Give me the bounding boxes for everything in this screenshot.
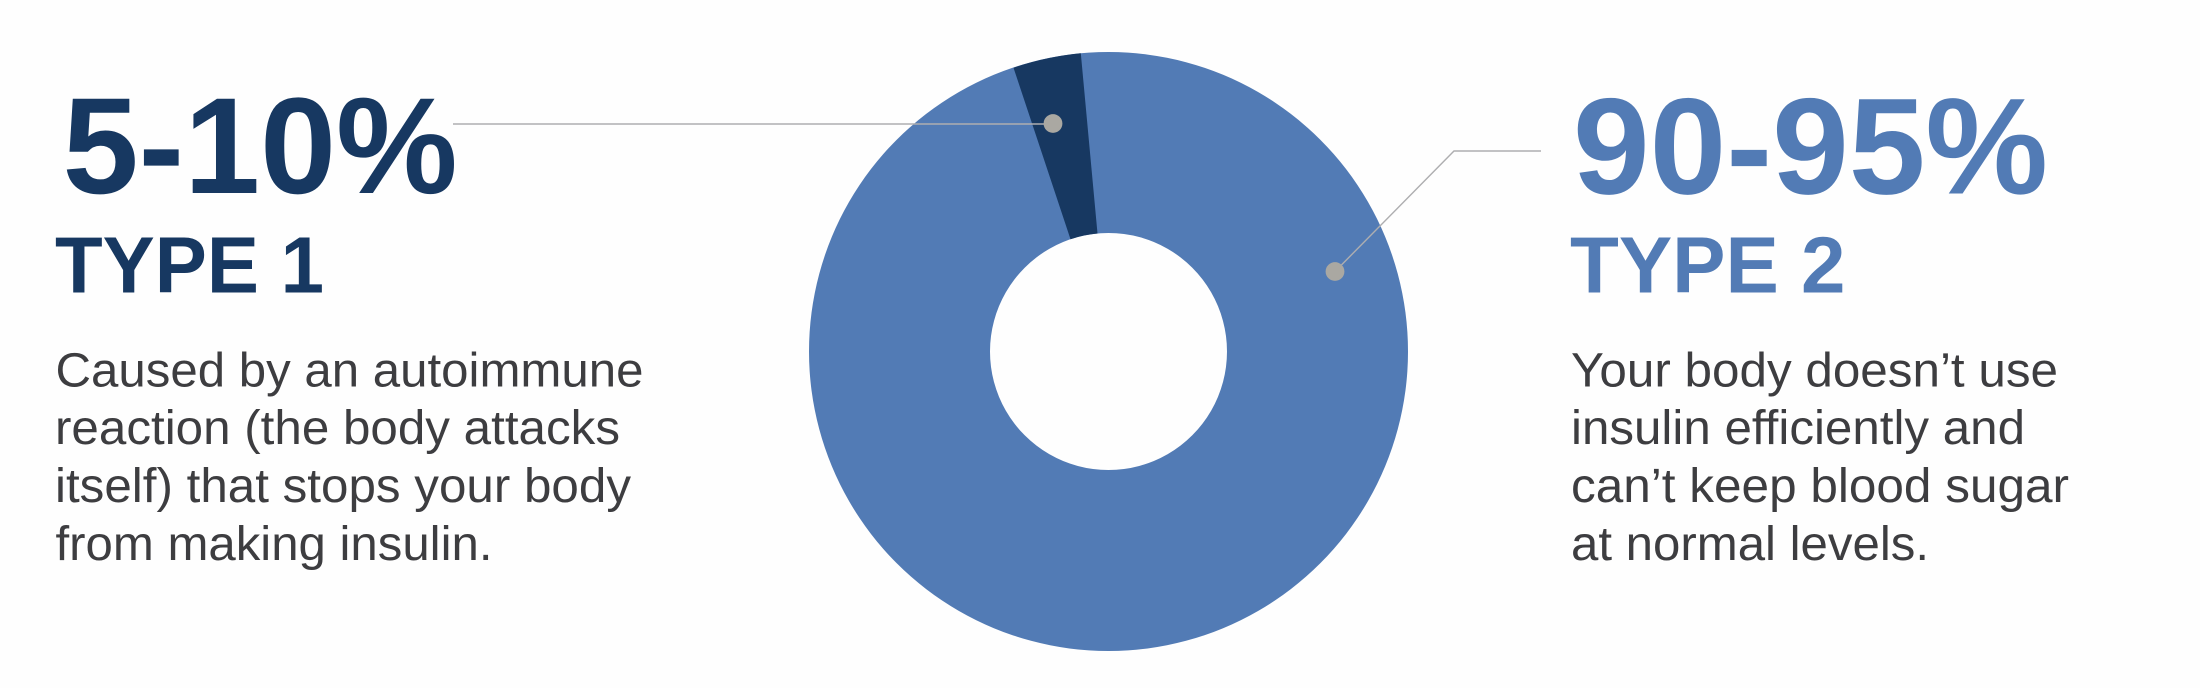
donut chart: [809, 52, 1408, 651]
type 2 description: Your body doesn’t use: [1571, 344, 2058, 398]
type 1 heading: TYPE 1: [55, 220, 324, 310]
type 1 description: reaction (the body attacks: [55, 402, 620, 455]
panel: type 2: [1570, 70, 2069, 571]
donut segment: type 2: [809, 52, 1408, 651]
panel: type 1: [55, 70, 644, 571]
type 1 description: itself) that stops your body: [55, 460, 631, 513]
type 2 description: can’t keep blood sugar: [1571, 460, 2069, 513]
type 2 description: at normal levels.: [1571, 518, 1929, 571]
type 1 description: Caused by an autoimmune: [56, 344, 644, 398]
donut segment: type 1: [1014, 53, 1098, 239]
type 2 heading: TYPE 2: [1570, 220, 1846, 310]
type 1 description: from making insulin.: [56, 518, 493, 571]
type 2 description: [1571, 344, 2069, 571]
type 2 description: insulin efficiently and: [1571, 402, 2025, 455]
type 1 percentage: 5-10%: [63, 70, 458, 223]
leader line: type 1: [453, 114, 1062, 133]
leader line: type 2: [1326, 151, 1541, 281]
type 1 description: [55, 344, 644, 571]
type 2 percentage: 90-95%: [1573, 70, 2048, 224]
